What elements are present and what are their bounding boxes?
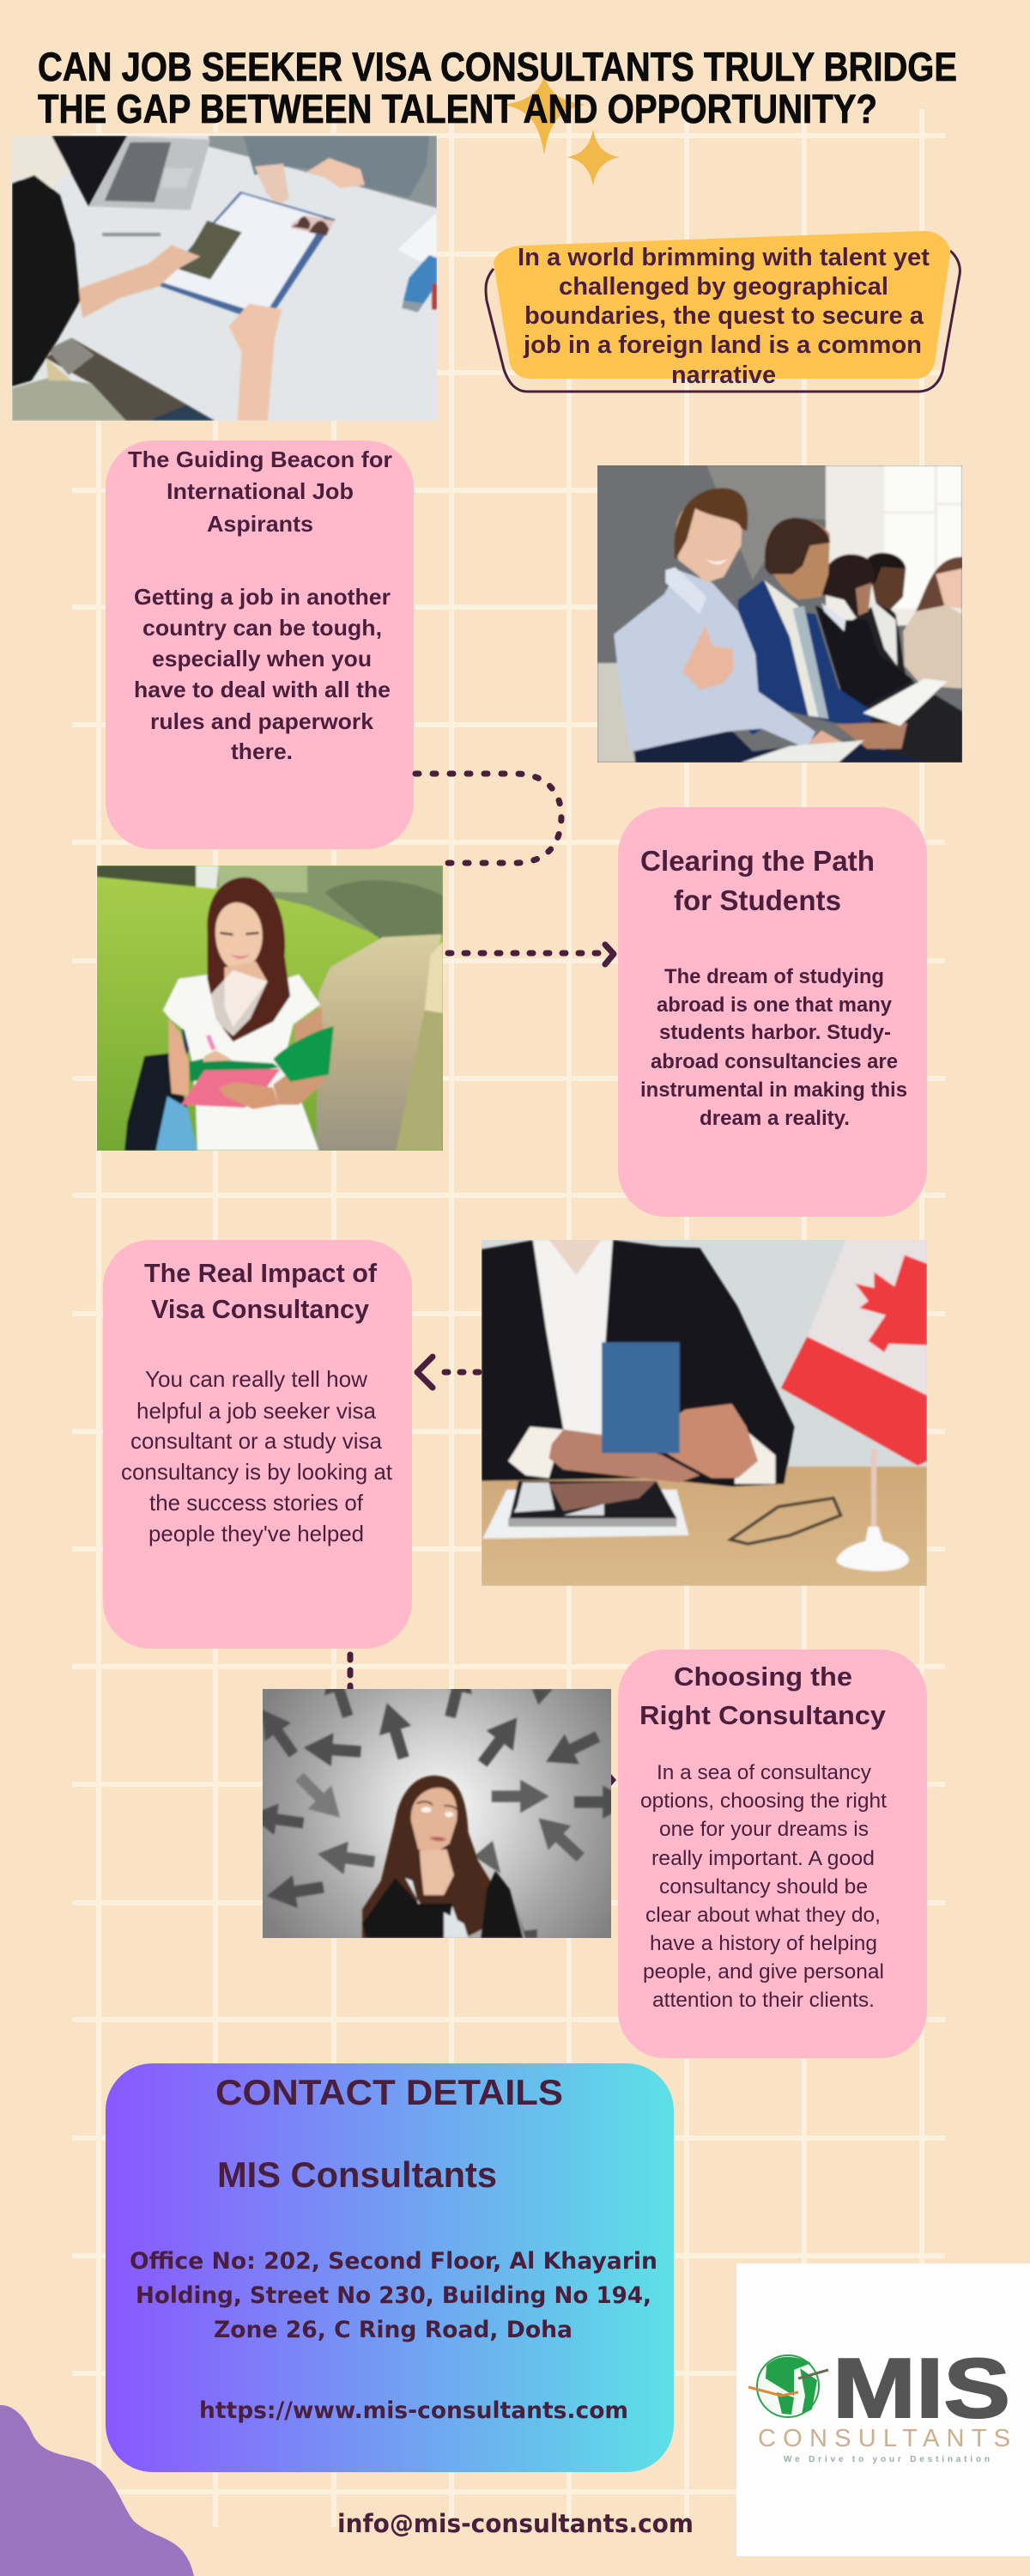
panel body text: [121, 1366, 393, 1546]
address: Office No: 202, Second Floor, Al Khayarin: [130, 2248, 657, 2275]
callout: intro quote: challenged by geographical: [559, 273, 888, 301]
logo: MIS Consultants: We Drive to your Destination: [784, 2455, 990, 2464]
panel body text: especially when you: [152, 646, 372, 671]
arrow: dashed left arrow to impact panel: [417, 1357, 479, 1388]
panel body text: [640, 965, 907, 1130]
panel heading: The Guiding Beacon for: [128, 447, 392, 472]
panel: choosing the right consultancy: [618, 1649, 927, 2058]
panel body text: [640, 1761, 887, 2012]
panel body text: abroad consultancies are: [651, 1050, 898, 1073]
panel body text: [134, 584, 391, 764]
callout: intro quote: [486, 231, 960, 392]
panel heading: Choosing the: [674, 1662, 852, 1692]
panel body text: abroad is one that many: [657, 993, 893, 1017]
panel: contact details: [106, 2063, 674, 2472]
panel body text: consultancy is by looking at: [121, 1459, 393, 1485]
panel body text: students harbor. Study-: [659, 1021, 891, 1044]
panel heading: Right Consultancy: [639, 1700, 887, 1730]
panel body text: options, choosing the right: [640, 1789, 887, 1813]
panel body text: The dream of studying: [664, 965, 884, 988]
panel heading: Visa Consultancy: [151, 1294, 370, 1324]
photo: student with notebook: [97, 866, 443, 1151]
arrow: dashed vertical connector: [347, 1655, 354, 1689]
callout: intro quote: In a world brimming with talent yet: [518, 244, 930, 271]
arrow: dashed connector curve: [415, 774, 561, 863]
icon: large sparkle star: [502, 74, 585, 155]
panel body text: Getting a job in another: [134, 584, 391, 610]
panel heading: for Students: [674, 884, 841, 916]
email: info@mis-consultants.com: [337, 2509, 694, 2538]
panel body text: one for your dreams is: [659, 1818, 869, 1841]
icon: globe: [748, 2355, 828, 2417]
callout: intro quote: narrative: [671, 361, 776, 389]
panel heading: Aspirants: [207, 511, 313, 537]
address: [130, 2248, 657, 2343]
panel heading: The Real Impact of: [144, 1258, 378, 1288]
panel heading: [144, 1258, 378, 1324]
contact heading: CONTACT DETAILS: [215, 2072, 563, 2112]
panel heading: [640, 845, 875, 916]
panel body text: have a history of helping: [650, 1932, 877, 1955]
panel body text: helpful a job seeker visa: [136, 1398, 377, 1424]
title: THE GAP BETWEEN TALENT AND OPPORTUNITY?: [38, 86, 877, 131]
company name: MIS Consultants: [217, 2154, 497, 2195]
panel body text: the success stories of: [149, 1490, 364, 1516]
photo: woman thinking among arrows: [263, 1689, 611, 1938]
panel body text: dream a reality.: [700, 1107, 850, 1130]
panel: clearing the path for students: [618, 807, 927, 1217]
photo: job candidates seated: [597, 465, 962, 762]
panel body text: have to deal with all the: [134, 677, 391, 702]
photo: passport application at desk: [12, 136, 437, 421]
panel body text: people, and give personal: [643, 1960, 884, 1984]
panel body text: consultancy should be: [659, 1875, 868, 1899]
address: Holding, Street No 230, Building No 194,: [136, 2282, 651, 2309]
panel: real impact of visa consultancy: [103, 1240, 412, 1649]
logo: MIS Consultants: MIS: [833, 2341, 1010, 2435]
address: Zone 26, C Ring Road, Doha: [214, 2317, 573, 2343]
panel body text: clear about what they do,: [645, 1904, 881, 1927]
logo: MIS Consultants: [736, 2263, 1030, 2556]
icon: small arrow tip beside photo: [611, 1774, 616, 1786]
icon: small sparkle star: [566, 129, 620, 186]
panel body text: consultant or a study visa: [130, 1428, 383, 1454]
panel heading: [639, 1662, 887, 1730]
panel heading: International Job: [167, 478, 354, 504]
callout: intro quote: job in a foreign land is a common: [523, 331, 922, 359]
website: https://www.mis-consultants.com: [199, 2397, 628, 2424]
callout: intro quote: boundaries, the quest to secure a: [524, 302, 924, 330]
panel body text: country can be tough,: [142, 615, 382, 641]
panel body text: attention to their clients.: [652, 1989, 875, 2012]
arrow: dashed right arrow to students panel: [448, 945, 614, 964]
panel body text: rules and paperwork: [150, 708, 374, 734]
panel: guiding beacon: [106, 440, 414, 849]
title: [38, 44, 957, 131]
logo: MIS Consultants: CONSULTANTS: [758, 2425, 1010, 2452]
panel body text: instrumental in making this: [640, 1078, 907, 1102]
panel heading: Clearing the Path: [640, 845, 875, 877]
panel body text: there.: [231, 738, 293, 764]
panel body text: really important. A good: [651, 1847, 875, 1870]
panel body text: You can really tell how: [145, 1366, 367, 1392]
panel heading: [128, 447, 392, 537]
photo: man with passport and Canadian flag: [482, 1240, 927, 1586]
panel body text: people they've helped: [148, 1521, 364, 1546]
decorative purple blob: [0, 2405, 194, 2576]
panel body text: In a sea of consultancy: [657, 1761, 871, 1784]
